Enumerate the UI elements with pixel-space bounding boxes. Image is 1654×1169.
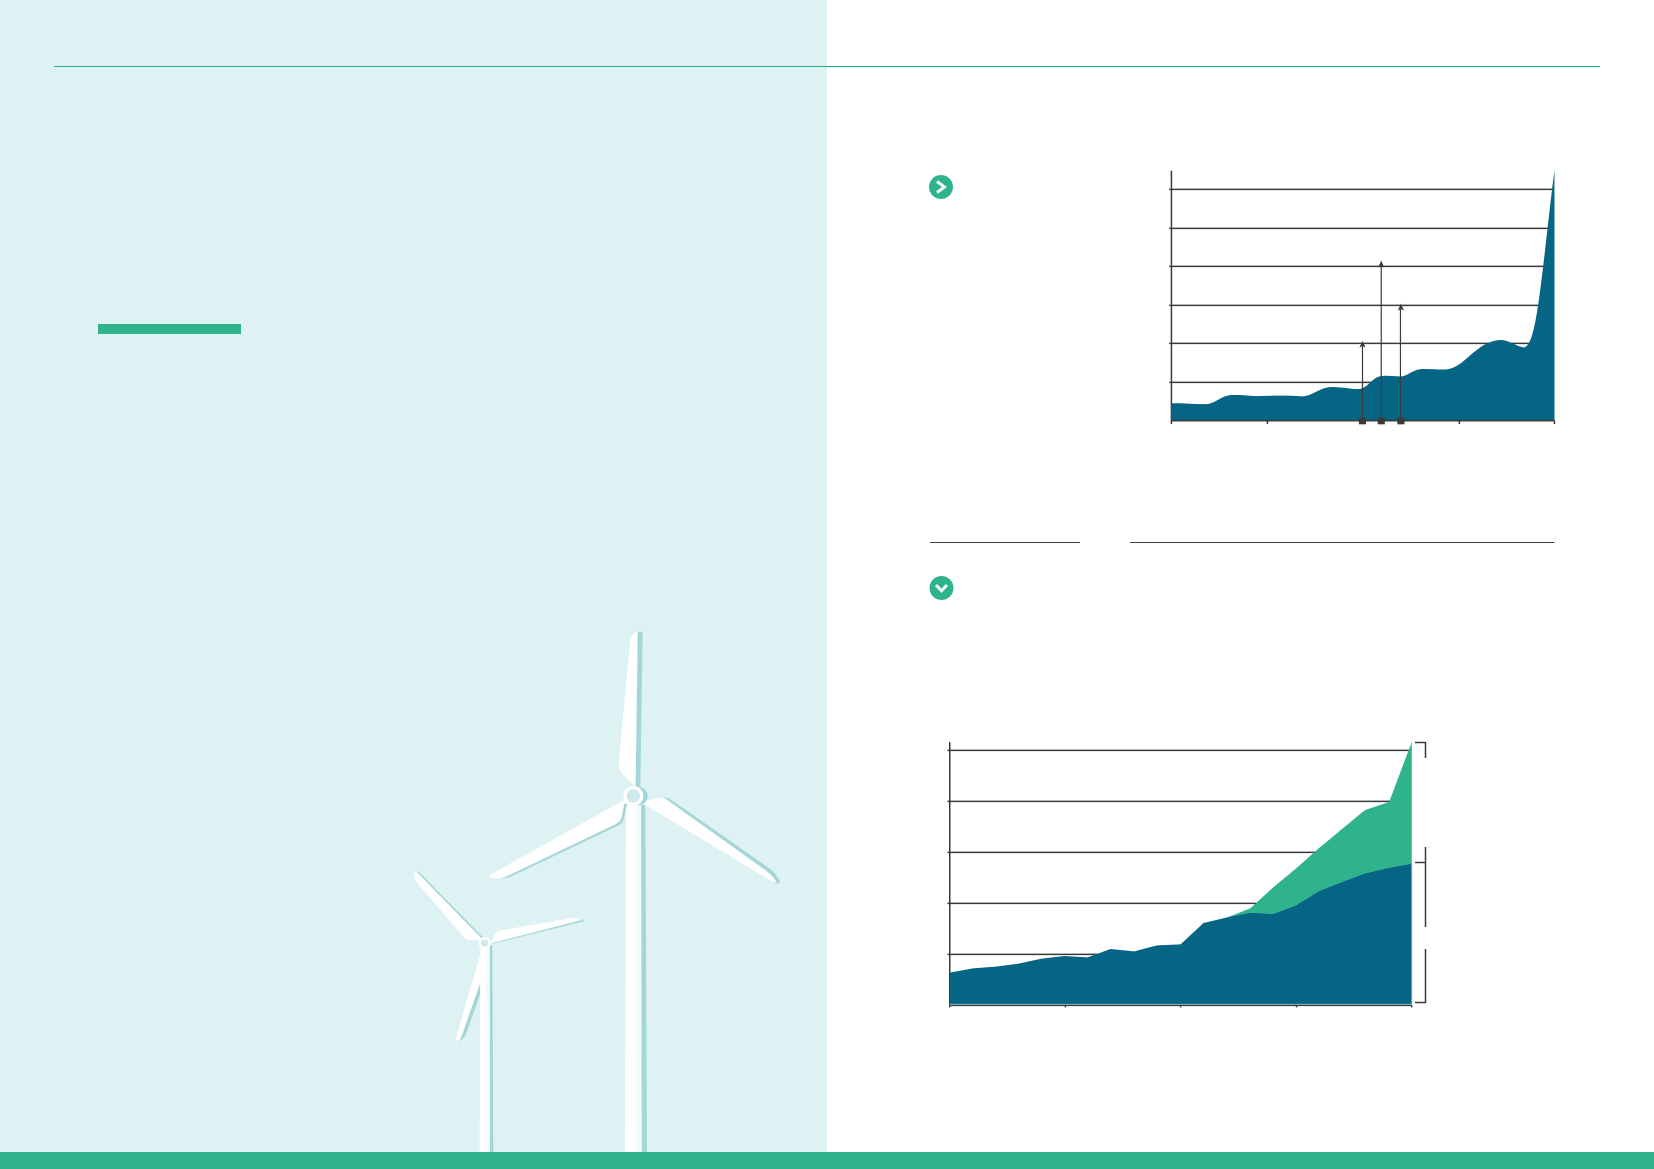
bottom green band <box>0 1152 1654 1169</box>
top blade <box>619 631 643 787</box>
small wind turbine <box>414 872 584 1152</box>
icon: down chevron badge <box>930 576 954 600</box>
lower blade <box>456 947 487 1042</box>
header rule <box>54 66 1600 67</box>
hub <box>479 937 491 949</box>
bracket: middle <box>1415 847 1426 927</box>
arrow: third milestone <box>1397 304 1404 424</box>
green area series <box>1227 742 1412 917</box>
hub <box>623 786 648 806</box>
upper-left blade <box>414 872 483 940</box>
section divider rules <box>930 542 1554 543</box>
chart edge highlight <box>950 864 1412 1004</box>
icon: right chevron badge <box>929 175 953 199</box>
lower-right blade <box>644 797 780 883</box>
accent bar <box>98 324 241 334</box>
arrow: first milestone <box>1359 341 1366 424</box>
bracket: top <box>1415 742 1426 758</box>
right blade <box>491 918 584 944</box>
baseline <box>1171 420 1554 422</box>
rear blade shadow <box>458 983 480 1042</box>
tower <box>625 805 647 1152</box>
chart axes and gridlines <box>1169 171 1554 424</box>
stacked area chart <box>947 742 1412 1007</box>
arrow: second milestone <box>1378 261 1385 424</box>
chart axes and gridlines <box>947 742 1412 1007</box>
lower-left blade <box>489 800 627 879</box>
bracket: bottom <box>1415 949 1426 1002</box>
area series <box>1171 171 1554 421</box>
blue area series <box>950 864 1412 1004</box>
line chart: area with milestone arrows <box>1169 171 1554 424</box>
tower <box>480 945 493 1152</box>
large wind turbine <box>489 631 780 1152</box>
panel: left light background <box>0 0 827 1169</box>
